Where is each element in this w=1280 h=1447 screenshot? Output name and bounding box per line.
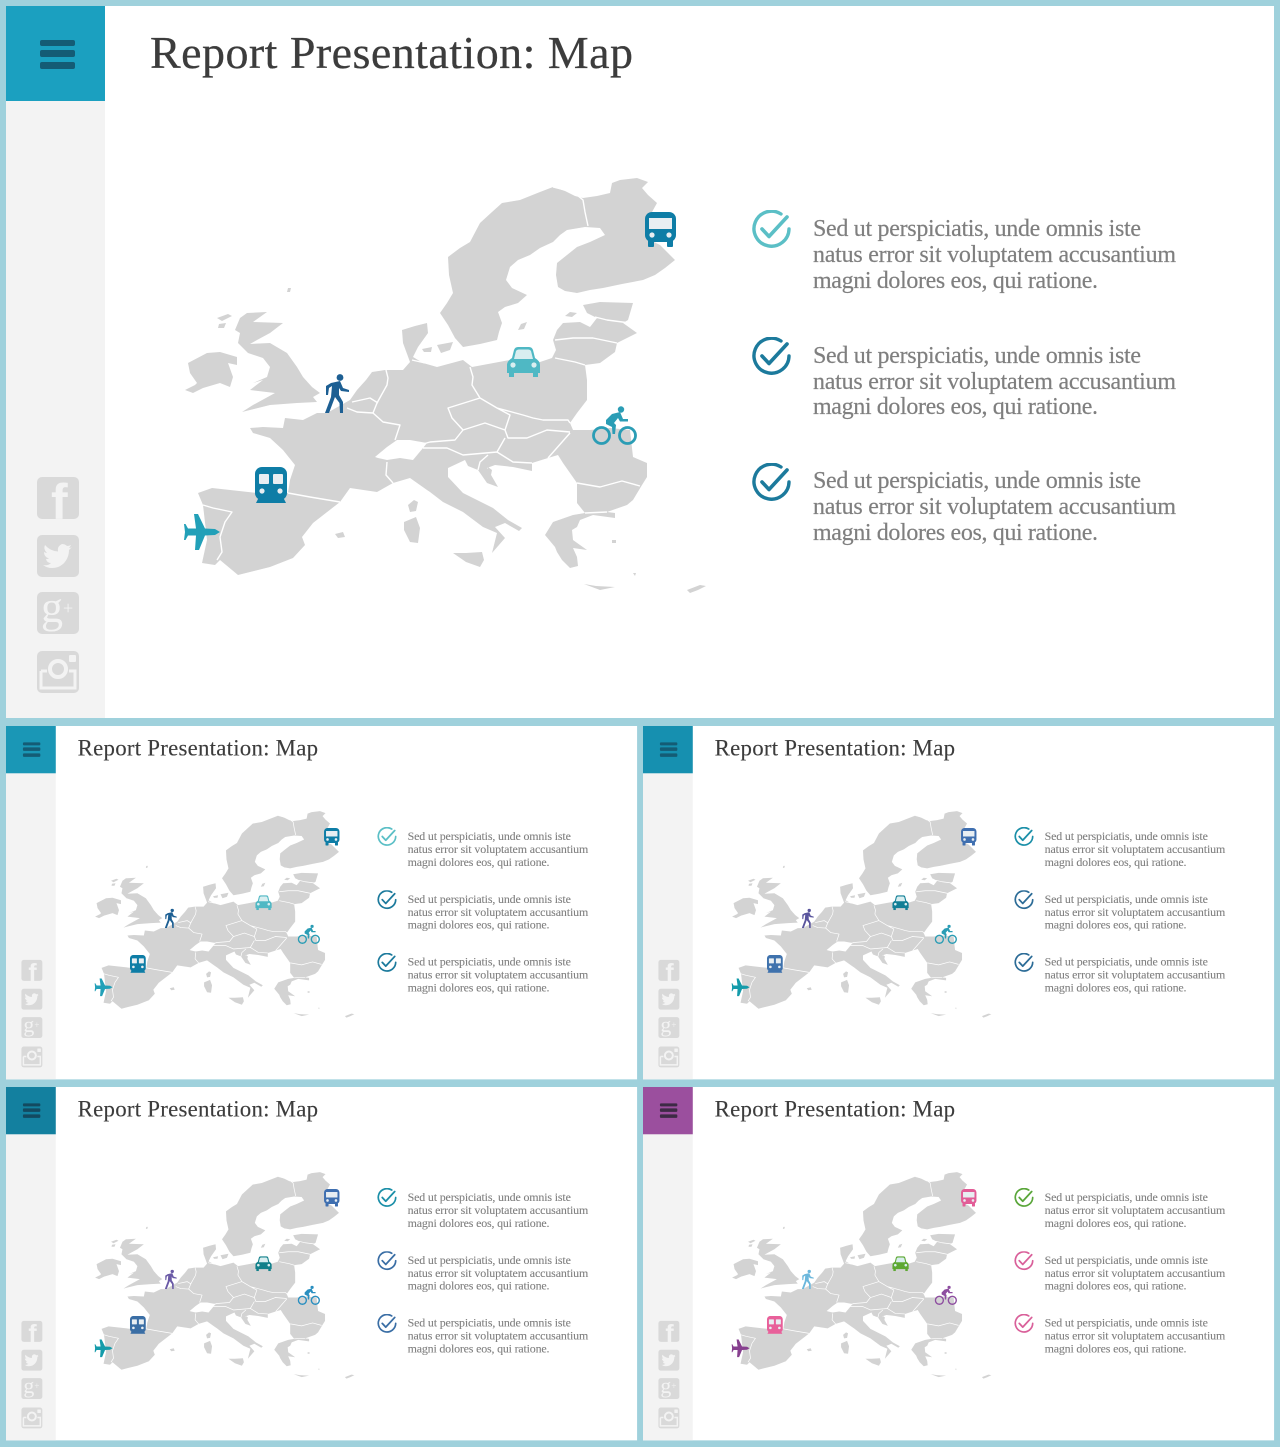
text block 2: natus error sit voluptatem accusantium (1045, 905, 1226, 919)
text block 1: Sed ut perspiciatis, unde omnis iste (813, 216, 1141, 242)
text block 1: Sed ut perspiciatis, unde omnis iste (408, 829, 571, 843)
text block 1: natus error sit voluptatem accusantium (408, 842, 589, 856)
text block 1: Sed ut perspiciatis, unde omnis iste (408, 1190, 571, 1204)
icon: plane (95, 978, 113, 996)
text block 3: natus error sit voluptatem accusantium (1045, 1328, 1226, 1342)
check 2 (378, 1252, 396, 1269)
icon: bus (324, 828, 339, 845)
text block 3: Sed ut perspiciatis, unde omnis iste (1045, 954, 1208, 968)
check 3 (754, 464, 789, 499)
social icons: f (28, 959, 37, 987)
icon: bicycle (298, 925, 319, 943)
check 2 (1015, 1252, 1033, 1269)
small slide: top right (643, 726, 1274, 1079)
text block 2: magni dolores eos, qui ratione. (408, 918, 550, 932)
text block 3: magni dolores eos, qui ratione. (813, 520, 1098, 546)
icon: bicycle (935, 925, 956, 943)
map of Europe (732, 1172, 991, 1379)
small slide: bottom right (643, 1087, 1274, 1440)
sidebar (643, 1087, 693, 1440)
icon: plane (732, 1339, 750, 1357)
social icons: + (34, 1020, 39, 1030)
text block 2: natus error sit voluptatem accusantium (1045, 1266, 1226, 1280)
text block 2: magni dolores eos, qui ratione. (1045, 918, 1187, 932)
icon: pedestrian (802, 909, 814, 928)
menu tile (6, 6, 105, 101)
title: Report Presentation: Map (715, 735, 955, 760)
icon: pedestrian (802, 1270, 814, 1289)
social icons (37, 474, 79, 693)
main slide (6, 6, 1274, 718)
icon: bus (324, 1189, 339, 1206)
check 1 (754, 211, 789, 246)
text block 2: magni dolores eos, qui ratione. (813, 394, 1098, 420)
map of Europe (732, 811, 991, 1018)
icon: car (892, 1256, 909, 1271)
title: Report Presentation: Map (78, 1096, 318, 1121)
text block 1: natus error sit voluptatem accusantium (1045, 1203, 1226, 1217)
icon: car (255, 1256, 272, 1271)
text block 1: natus error sit voluptatem accusantium (813, 242, 1176, 268)
text block 2: Sed ut perspiciatis, unde omnis iste (1045, 892, 1208, 906)
text block 2: Sed ut perspiciatis, unde omnis iste (408, 1253, 571, 1267)
text block 3: natus error sit voluptatem accusantium (408, 1328, 589, 1342)
social icons (658, 1320, 679, 1428)
icon: pedestrian (165, 909, 177, 928)
check 1 (378, 1189, 396, 1206)
check 3 (1015, 1315, 1033, 1332)
text block 3: Sed ut perspiciatis, unde omnis iste (408, 1315, 571, 1329)
check 2 (1015, 891, 1033, 908)
title: Report Presentation: Map (150, 27, 633, 78)
menu tile (643, 1087, 693, 1134)
text block 3: magni dolores eos, qui ratione. (1045, 1341, 1187, 1355)
check 1 (1015, 828, 1033, 845)
map of Europe (95, 1172, 354, 1379)
text block 2: magni dolores eos, qui ratione. (408, 1279, 550, 1293)
icon: bicycle (594, 406, 636, 444)
sidebar (6, 6, 105, 718)
icon: plane (95, 1339, 113, 1357)
text block 3: natus error sit voluptatem accusantium (1045, 967, 1226, 981)
text block 3: magni dolores eos, qui ratione. (408, 1341, 550, 1355)
social icons: + (34, 1381, 39, 1391)
icon: car (892, 895, 909, 910)
social icons: f (28, 1320, 37, 1348)
icon: bus (961, 1189, 976, 1206)
social icons: f (51, 474, 68, 530)
map of Europe (185, 178, 706, 593)
icon: pedestrian (165, 1270, 177, 1289)
icon: bus (961, 828, 976, 845)
text block 3: Sed ut perspiciatis, unde omnis iste (813, 468, 1141, 494)
text block 2: natus error sit voluptatem accusantium (408, 1266, 589, 1280)
check 3 (1015, 954, 1033, 971)
text block 1: magni dolores eos, qui ratione. (408, 1216, 550, 1230)
small slide: bottom left (6, 1087, 637, 1440)
icon: car (507, 347, 540, 377)
small slide: top left (6, 726, 637, 1079)
social icons: + (63, 598, 73, 618)
title: Report Presentation: Map (715, 1096, 955, 1121)
text block 1: magni dolores eos, qui ratione. (1045, 855, 1187, 869)
text block 2: magni dolores eos, qui ratione. (1045, 1279, 1187, 1293)
check 2 (378, 891, 396, 908)
text block 3: magni dolores eos, qui ratione. (408, 980, 550, 994)
text block 1: magni dolores eos, qui ratione. (408, 855, 550, 869)
social icons: + (671, 1020, 676, 1030)
icon: train (255, 467, 287, 503)
social icons (21, 1320, 42, 1428)
social icons (658, 959, 679, 1067)
social icons: f (665, 1320, 674, 1348)
menu tile (643, 726, 693, 773)
icon: bicycle (935, 1286, 956, 1304)
social icons: + (671, 1381, 676, 1391)
check 3 (378, 954, 396, 971)
social icons: g (660, 1373, 671, 1398)
check 2 (754, 338, 789, 373)
social icons: f (665, 959, 674, 987)
icon: plane (184, 514, 220, 550)
icon: plane (732, 978, 750, 996)
text block 3: magni dolores eos, qui ratione. (1045, 980, 1187, 994)
icon: train (130, 955, 146, 973)
menu tile (6, 726, 56, 773)
social icons (21, 959, 42, 1067)
social icons: g (41, 583, 63, 632)
icon: pedestrian (325, 374, 349, 413)
map of Europe (95, 811, 354, 1018)
text block 3: Sed ut perspiciatis, unde omnis iste (1045, 1315, 1208, 1329)
check 1 (378, 828, 396, 845)
menu tile (6, 1087, 56, 1134)
social icons: g (23, 1012, 34, 1037)
text block 1: Sed ut perspiciatis, unde omnis iste (1045, 1190, 1208, 1204)
text block 3: Sed ut perspiciatis, unde omnis iste (408, 954, 571, 968)
text block 2: natus error sit voluptatem accusantium (813, 369, 1176, 395)
icon: bus (645, 212, 676, 247)
text block 1: magni dolores eos, qui ratione. (1045, 1216, 1187, 1230)
social icons: g (23, 1373, 34, 1398)
text block 1: magni dolores eos, qui ratione. (813, 268, 1098, 294)
icon: train (130, 1316, 146, 1334)
title: Report Presentation: Map (78, 735, 318, 760)
sidebar (643, 726, 693, 1079)
social icons: g (660, 1012, 671, 1037)
text block 2: Sed ut perspiciatis, unde omnis iste (408, 892, 571, 906)
text block 1: Sed ut perspiciatis, unde omnis iste (1045, 829, 1208, 843)
text block 1: natus error sit voluptatem accusantium (1045, 842, 1226, 856)
sidebar (6, 1087, 56, 1440)
sidebar (6, 726, 56, 1079)
check 1 (1015, 1189, 1033, 1206)
text block 2: Sed ut perspiciatis, unde omnis iste (1045, 1253, 1208, 1267)
check 3 (378, 1315, 396, 1332)
text block 2: natus error sit voluptatem accusantium (408, 905, 589, 919)
text block 3: natus error sit voluptatem accusantium (813, 494, 1176, 520)
text block 3: natus error sit voluptatem accusantium (408, 967, 589, 981)
icon: car (255, 895, 272, 910)
text block 2: Sed ut perspiciatis, unde omnis iste (813, 343, 1141, 369)
icon: bicycle (298, 1286, 319, 1304)
text block 1: natus error sit voluptatem accusantium (408, 1203, 589, 1217)
icon: train (767, 1316, 783, 1334)
icon: train (767, 955, 783, 973)
